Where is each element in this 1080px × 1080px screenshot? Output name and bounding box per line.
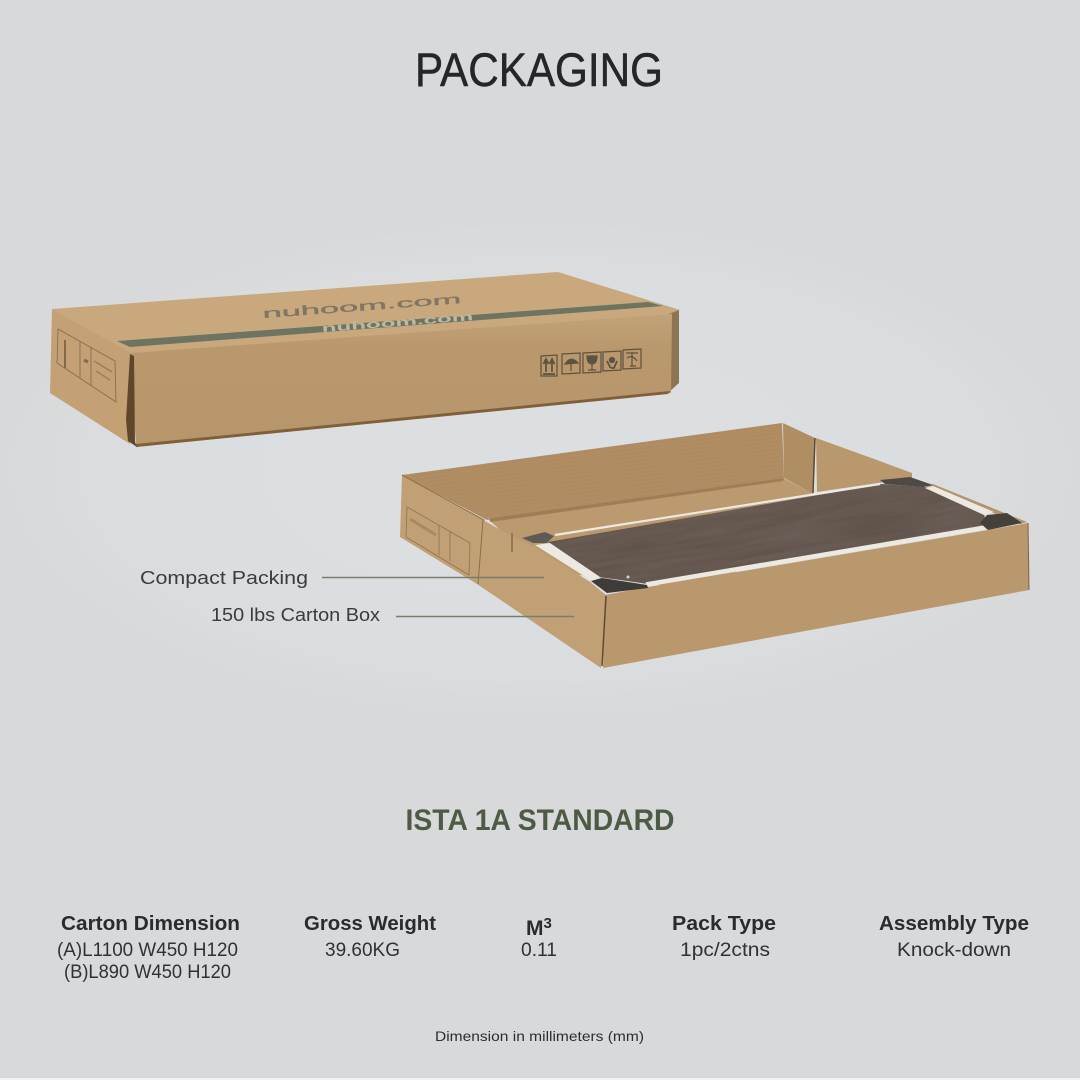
spec: assembly type: [879, 912, 1029, 961]
carton top face: [52, 272, 680, 354]
carton corner fold: [126, 354, 137, 447]
near left wall: [477, 520, 606, 668]
green tape on top: [117, 302, 663, 347]
corner protector back: [880, 477, 933, 487]
back inner wall: [402, 423, 784, 520]
icon: handling symbols: [541, 349, 641, 376]
spec: carton dimension: (A)L1100 W450 H120: [57, 940, 238, 961]
wood panel: [548, 484, 985, 584]
spec: pack type: Pack Type: [672, 912, 776, 935]
spec: carton dimension: [57, 912, 240, 983]
left white rail: [535, 543, 600, 581]
spec: volume: 0.11: [521, 940, 557, 961]
carton right end: [669, 310, 679, 392]
brand text on tape: nuhoom.com: [321, 311, 474, 335]
carton left side: [50, 309, 132, 444]
left outer face: [400, 475, 485, 584]
spec: gross weight: [304, 912, 436, 961]
corner protector right: [980, 513, 1022, 530]
spec: assembly type: Assembly Type: [879, 912, 1029, 935]
spec: carton dimension: (B)L890 W450 H120: [64, 962, 231, 983]
callout: carton box: 150 lbs Carton Box: [211, 604, 381, 625]
spec: volume: [521, 915, 557, 961]
spec: gross weight: Gross Weight: [304, 912, 436, 935]
front white rail: [646, 528, 985, 584]
back right flap: [816, 438, 912, 492]
spec: volume: 3: [544, 915, 552, 932]
spec: carton dimension: Carton Dimension: [61, 912, 240, 935]
carton front face: [131, 314, 672, 447]
far white rail: [555, 484, 880, 535]
right white rail: [925, 486, 994, 515]
side label: [57, 329, 116, 402]
printed label on side: [406, 507, 470, 575]
spec: volume: M: [526, 917, 544, 940]
carton bottom edge: [136, 391, 670, 447]
corner protector front: [591, 578, 648, 593]
inner corner wall: [783, 423, 815, 494]
spec: pack type: 1pc/2ctns: [680, 940, 770, 961]
front outer face: [603, 523, 1029, 668]
callout: compact packing: Compact Packing: [140, 567, 308, 588]
standard heading: ISTA 1A STANDARD: [406, 804, 674, 837]
spec: gross weight: 39.60KG: [325, 940, 400, 961]
spec: pack type: [672, 912, 776, 961]
footnote: Dimension in millimeters (mm): [435, 1028, 644, 1044]
brand text on top: nuhoom.com: [262, 291, 462, 321]
spec: assembly type: Knock-down: [897, 940, 1011, 961]
carton floor: [487, 478, 900, 590]
right wall edge: [925, 484, 1027, 524]
closed carton box: [50, 272, 680, 447]
corner protector left: [522, 532, 554, 543]
panel screw dot: [626, 576, 630, 578]
title: PACKAGING: [415, 43, 663, 96]
open carton box with panel: [400, 423, 1030, 668]
